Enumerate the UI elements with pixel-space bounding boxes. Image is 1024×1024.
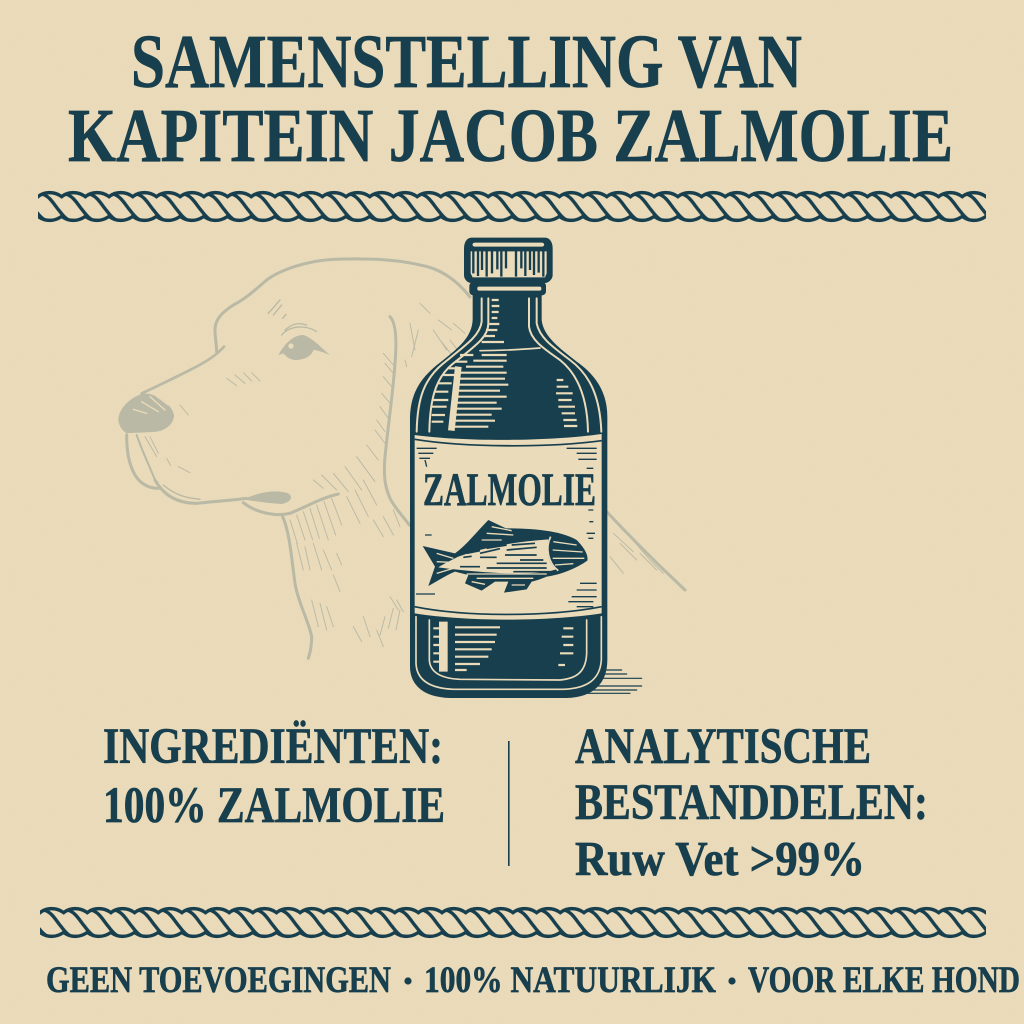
title: SAMENSTELLING VAN [131, 20, 802, 104]
panel: analytical constituents: ANALYTISCHE [575, 719, 871, 775]
panel: analytical constituents: Ruw Vet >99% [575, 831, 865, 886]
column divider [508, 741, 510, 866]
icon: salmon on label [423, 520, 588, 593]
panel: analytical constituents [575, 719, 928, 886]
bottom rope divider [40, 906, 986, 939]
bottle shadow hatching [580, 670, 642, 693]
bottle [410, 238, 607, 698]
bottle neck ring [469, 282, 546, 295]
title [68, 20, 953, 178]
bottle label text: ZALMOLIE [423, 464, 596, 516]
panel: ingredients: 100% ZALMOLIE [103, 778, 445, 834]
panel: analytical constituents: BESTANDDELEN: [575, 775, 928, 831]
dog mouth corner [243, 491, 291, 504]
footer claims: GEEN TOEVOEGINGEN [46, 960, 391, 1001]
dog eye [268, 300, 330, 360]
footer claims [46, 960, 1020, 1001]
panel: ingredients: INGREDIËNTEN: [103, 719, 443, 775]
dog fur hatching [145, 303, 663, 647]
bottle label [415, 434, 602, 620]
dog nose [118, 393, 174, 433]
dog outline [127, 259, 685, 658]
bottle cap [464, 238, 553, 283]
dog illustration [118, 259, 685, 658]
panel: ingredients [103, 719, 445, 834]
bottle body [410, 293, 607, 698]
footer claims: 100% NATUURLIJK [424, 960, 716, 1001]
glass highlights [416, 298, 601, 689]
top rope divider [38, 190, 986, 223]
glass hatching [432, 300, 577, 672]
